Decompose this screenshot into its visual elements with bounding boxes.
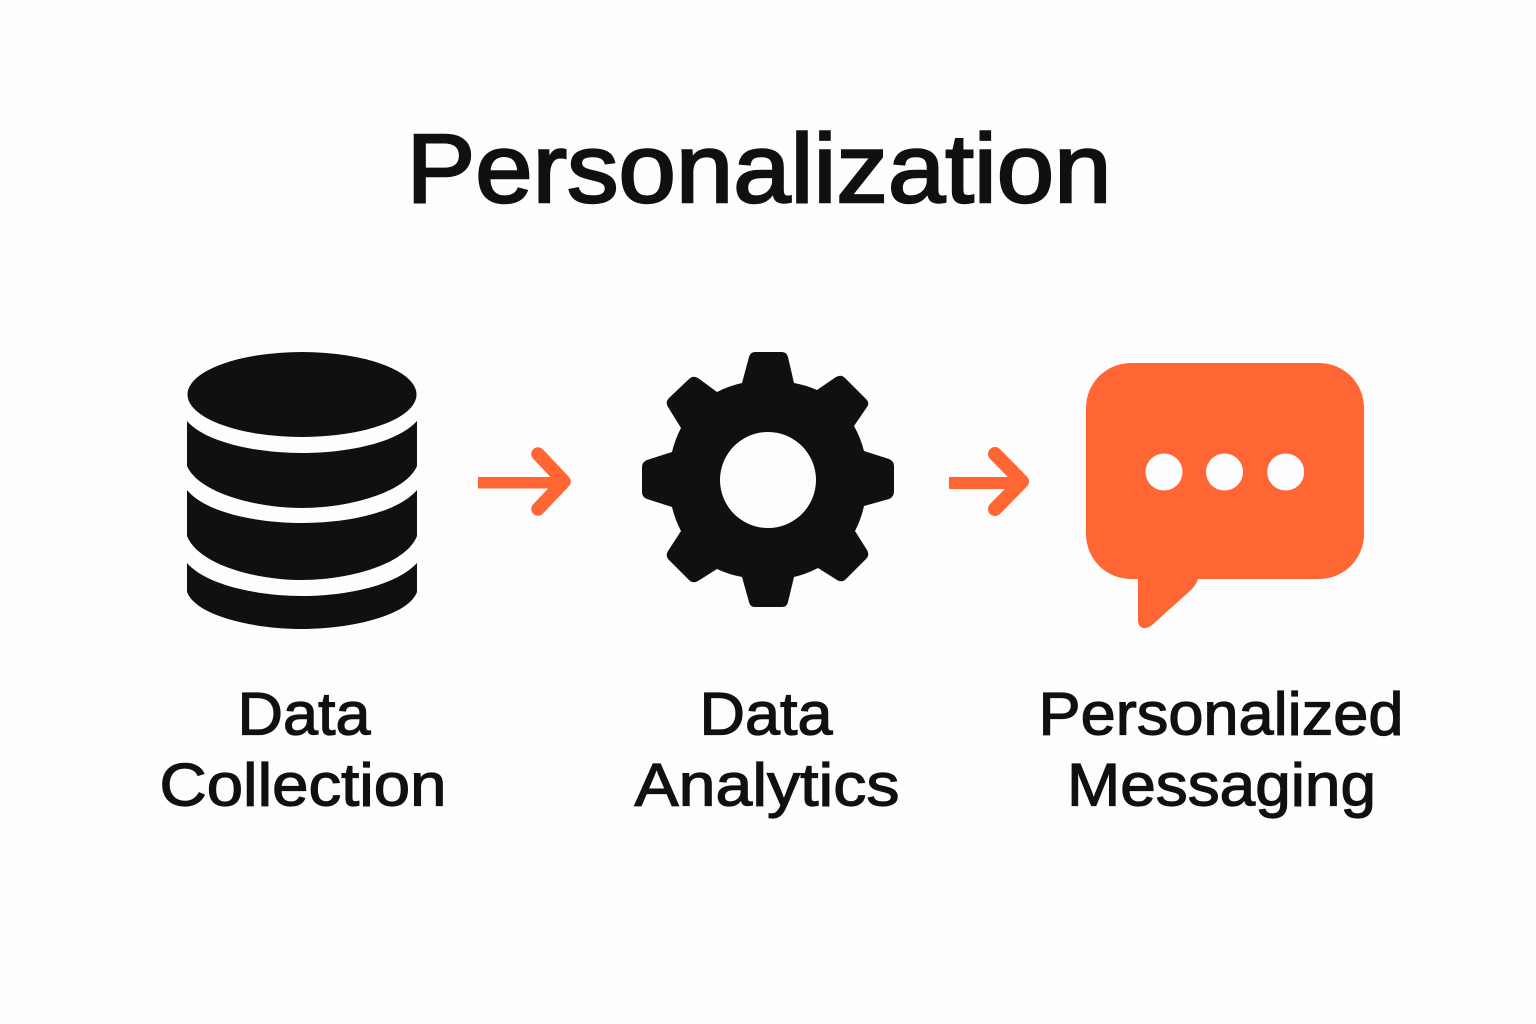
label: data analytics: Analytics [634,752,900,818]
title: Personalization [406,114,1112,223]
icon: gear [642,352,894,607]
label: personalized messaging [1038,680,1404,818]
label: data analytics [634,680,900,818]
arrow: analytics to messaging [949,454,1022,509]
arrow: collection to analytics [478,454,564,509]
label: data analytics: Data [700,680,833,748]
label: personalized messaging: Personalized [1038,680,1404,748]
label: data collection: Data [238,680,371,748]
icon: speech bubble [1086,363,1364,628]
label: data collection: Collection [160,752,446,818]
icon: database [187,352,417,629]
label: data collection [160,680,446,818]
label: personalized messaging: Messaging [1067,752,1376,818]
